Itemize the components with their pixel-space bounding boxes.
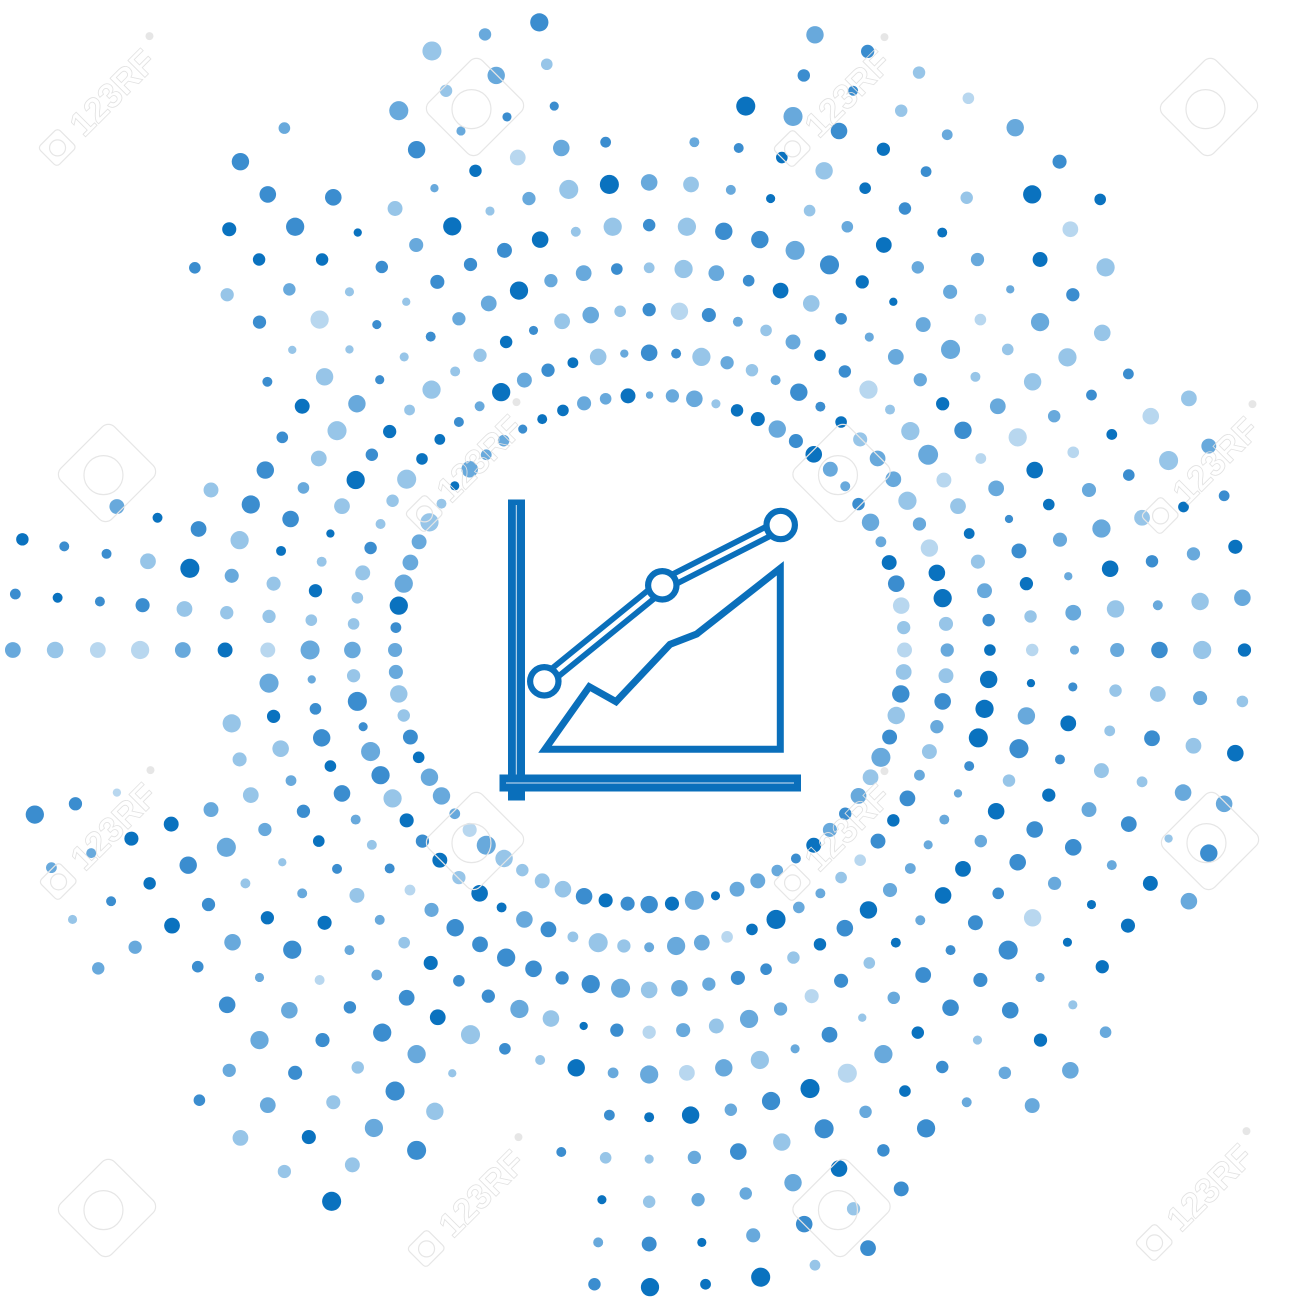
watermarks: 123RF text: 123RF (1159, 1137, 1261, 1239)
watermarks: 123RF text: 123RF (797, 43, 899, 145)
watermarks: 123RF text: 123RF (62, 42, 164, 144)
dots: bottom-left quadrant (26, 665, 659, 1296)
dots: bottom-right quadrant (665, 664, 1248, 1290)
dots: top-left quadrant (5, 13, 657, 660)
horizontal axis (500, 774, 801, 792)
area graph (545, 568, 780, 749)
watermarks: 123RF text: 123RF (1165, 410, 1267, 512)
watermarks: 123RF text: 123RF (797, 777, 899, 879)
dots: top-right quadrant (666, 26, 1251, 659)
icon: line chart with area graph (500, 500, 801, 800)
watermarks: 123RF text: 123RF (63, 776, 165, 878)
watermarks: 123RF text: 123RF (431, 1143, 533, 1245)
watermarks: 123RF text: 123RF (429, 408, 531, 510)
trend line with data points (530, 511, 795, 696)
vertical axis (508, 500, 525, 800)
